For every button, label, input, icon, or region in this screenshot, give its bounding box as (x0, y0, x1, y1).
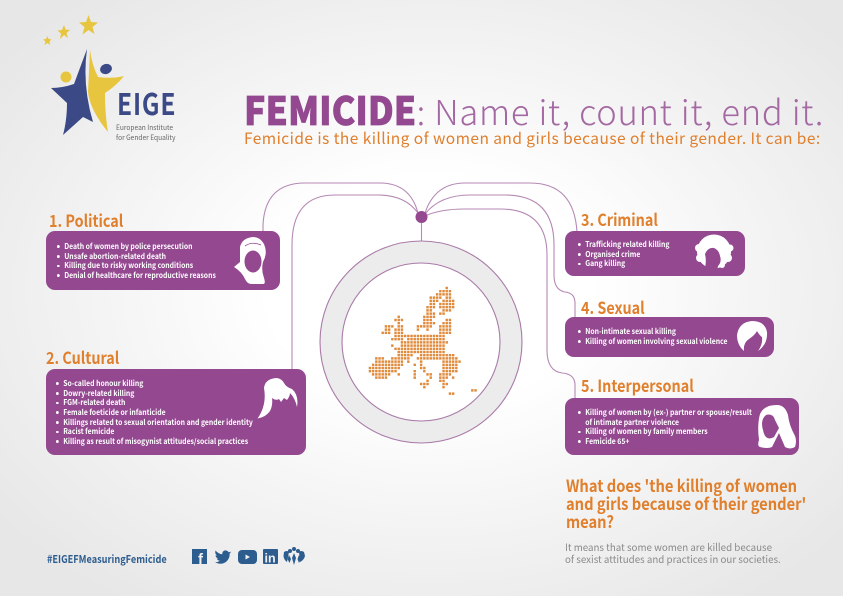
panel: cultural: So-called honour killing (63, 378, 143, 389)
panel: cultural: Dowry-related killing (63, 388, 134, 399)
callout heading: meaning question: What does 'the killing of women (566, 472, 797, 496)
logo subtitle (116, 123, 176, 143)
connector lines (263, 183, 577, 398)
icon: three stars (43, 15, 98, 45)
panel: political: Death of women by police persecution (64, 241, 192, 252)
icon: blue figure (51, 49, 93, 135)
panel: political (46, 231, 280, 290)
panel: criminal: Trafficking related killing (585, 239, 669, 250)
heading: 3. Criminal: 3. Criminal (581, 207, 658, 231)
panel: cultural: Racist femicide (63, 426, 114, 437)
icon: linkedin: in (264, 552, 276, 566)
panel: cultural (46, 369, 306, 455)
panel: cultural: Killings related to sexual orientation and gender identity (63, 417, 252, 428)
logo wordmark: EIGE (116, 80, 176, 124)
icon: long hair with ponytail (258, 378, 298, 418)
panel: political: Unsafe abortion-related death (64, 251, 165, 262)
callout text: meaning answer (565, 539, 781, 566)
hashtag: #EIGEFMeasuringFemicide (47, 551, 167, 567)
map of Europe in dots (369, 288, 477, 394)
logo: EIGE (43, 15, 176, 143)
callout text: meaning answer: of sexist attitudes and practices in our societies. (565, 551, 781, 566)
panel: cultural: Killing as result of misogynist attitudes/social practices (63, 436, 248, 447)
callout heading: meaning question (566, 472, 806, 532)
panel: political: Denial of healthcare for reproductive reasons (64, 270, 215, 281)
icon: stars globe (284, 547, 305, 565)
heading: 2. Cultural: 2. Cultural (46, 345, 119, 369)
logo subtitle: for Gender Equality (116, 133, 175, 143)
panel: sexual: Killing of women involving sexual violence (585, 336, 727, 347)
panel: sexual: Non-intimate sexual killing (585, 326, 675, 337)
icon: yellow head (60, 72, 72, 82)
social icons (192, 547, 305, 568)
panel: interpersonal: Killing of women by (ex-) partner or spouse/result (585, 407, 751, 418)
title (244, 81, 824, 137)
icon: long hair (758, 405, 796, 448)
title: FEMICIDE (244, 81, 416, 137)
icon: twitter (215, 550, 231, 564)
callout text: meaning answer: It means that some women are killed because (565, 539, 772, 554)
subtitle: Femicide is the killing of women and girls because of their gender. It can be: (244, 127, 821, 149)
icon: yellow figure (88, 50, 124, 132)
ring around map (320, 241, 522, 443)
panel: criminal: Gang killing (585, 258, 625, 269)
heading: 5. Interpersonal: 5. Interpersonal (581, 373, 694, 397)
heading: 4. Sexual: 4. Sexual (581, 295, 645, 319)
callout heading: meaning question: and girls because of their gender' (566, 490, 806, 514)
icon: facebook: f (198, 551, 204, 568)
callout heading: meaning question: mean? (566, 508, 614, 532)
heading: 1. Political: 1. Political (49, 208, 123, 232)
panel: interpersonal (565, 398, 799, 455)
icon: short hair (737, 321, 768, 351)
panel: cultural: Female foeticide or infanticide (63, 407, 165, 418)
connector hub dot (416, 211, 428, 223)
panel: interpersonal: Femicide 65+ (585, 436, 629, 447)
panel: criminal: Organised crime (585, 249, 640, 260)
icon: youtube (238, 550, 257, 564)
title: : Name it, count it, end it. (417, 85, 824, 135)
panel: interpersonal: of intimate partner violence (585, 417, 678, 428)
icon: hijab (234, 237, 266, 284)
panel: cultural: FGM-related death (63, 397, 125, 408)
logo subtitle: European Institute (116, 123, 173, 133)
panel: political: Killing due to risky working conditions (64, 260, 193, 271)
icon: blue head (99, 62, 113, 76)
panel: criminal (565, 231, 745, 276)
icon: afro hair (695, 234, 734, 268)
panel: interpersonal: Killing of women by family members (585, 426, 707, 437)
panel: sexual (565, 317, 774, 357)
